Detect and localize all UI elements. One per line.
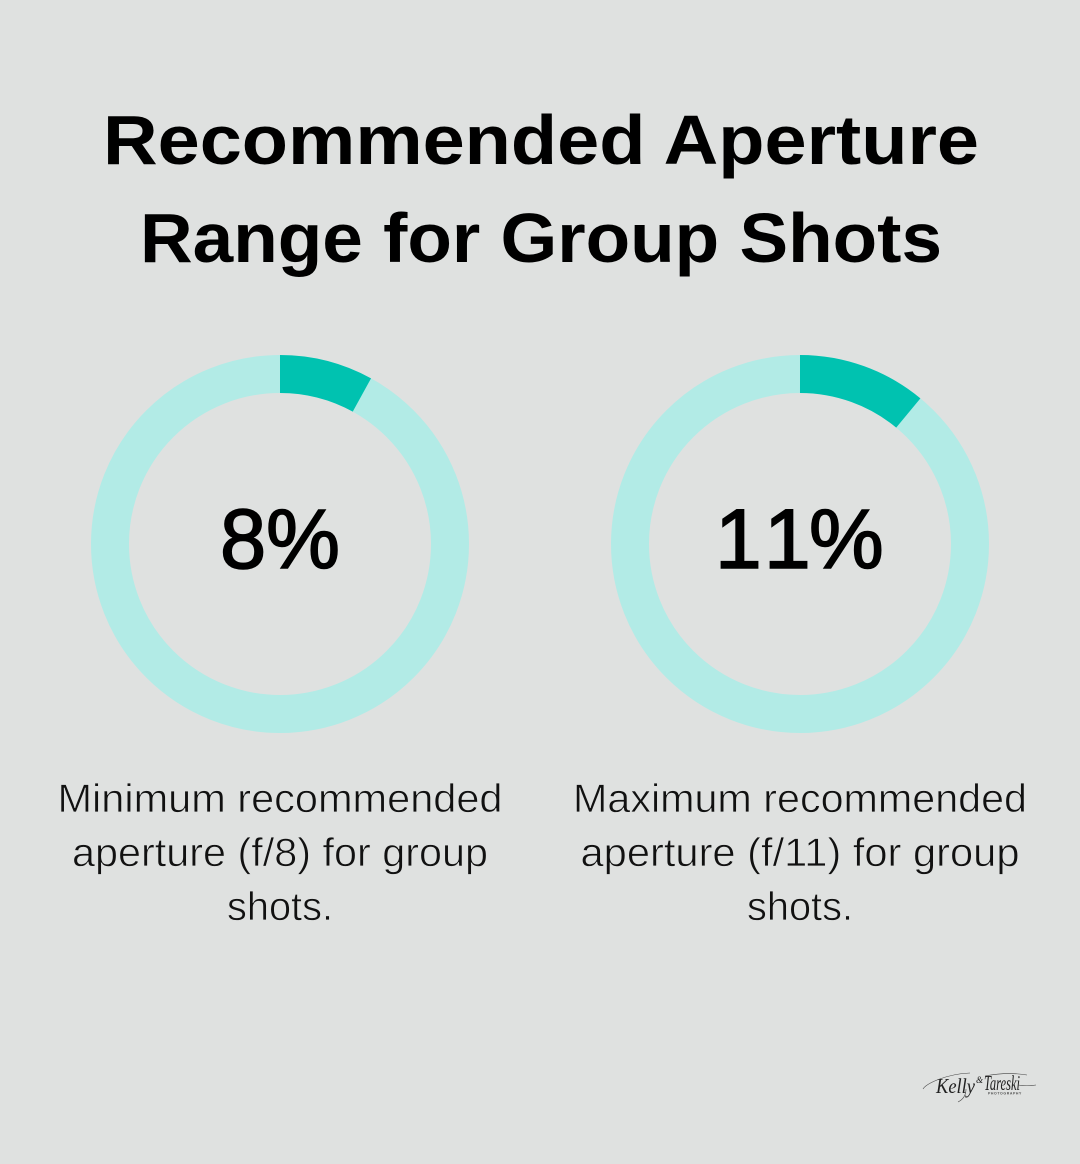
- logo: Kelly & Tareski Photography: PHOTOGRAPHY: [988, 1092, 1022, 1096]
- logo: Kelly & Tareski Photography: [923, 1071, 1036, 1102]
- donut chart: 11%: [630, 374, 970, 714]
- description: maximum aperture: [573, 777, 1027, 929]
- description: minimum aperture: [58, 777, 502, 929]
- title: [103, 101, 979, 277]
- value: 8%: 8%: [220, 492, 340, 586]
- description: maximum aperture: Maximum recommended: [573, 777, 1027, 821]
- panel: minimum aperture: [58, 374, 502, 929]
- description: minimum aperture: aperture (f/8) for group: [72, 831, 488, 875]
- logo: Kelly & Tareski Photography: Kelly: [935, 1074, 976, 1098]
- donut chart: 8%: [110, 374, 450, 714]
- logo: Kelly & Tareski Photography: &: [976, 1075, 983, 1085]
- panel: maximum aperture: [573, 374, 1027, 929]
- description: minimum aperture: shots.: [227, 885, 333, 929]
- title: Recommended Aperture: [103, 101, 979, 179]
- value: 11%: 11%: [715, 492, 884, 586]
- title: Range for Group Shots: [140, 199, 942, 277]
- logo: Kelly & Tareski Photography: Tareski: [984, 1071, 1020, 1095]
- description: maximum aperture: aperture (f/11) for group: [580, 831, 1020, 875]
- description: maximum aperture: shots.: [747, 885, 853, 929]
- description: minimum aperture: Minimum recommended: [58, 777, 502, 821]
